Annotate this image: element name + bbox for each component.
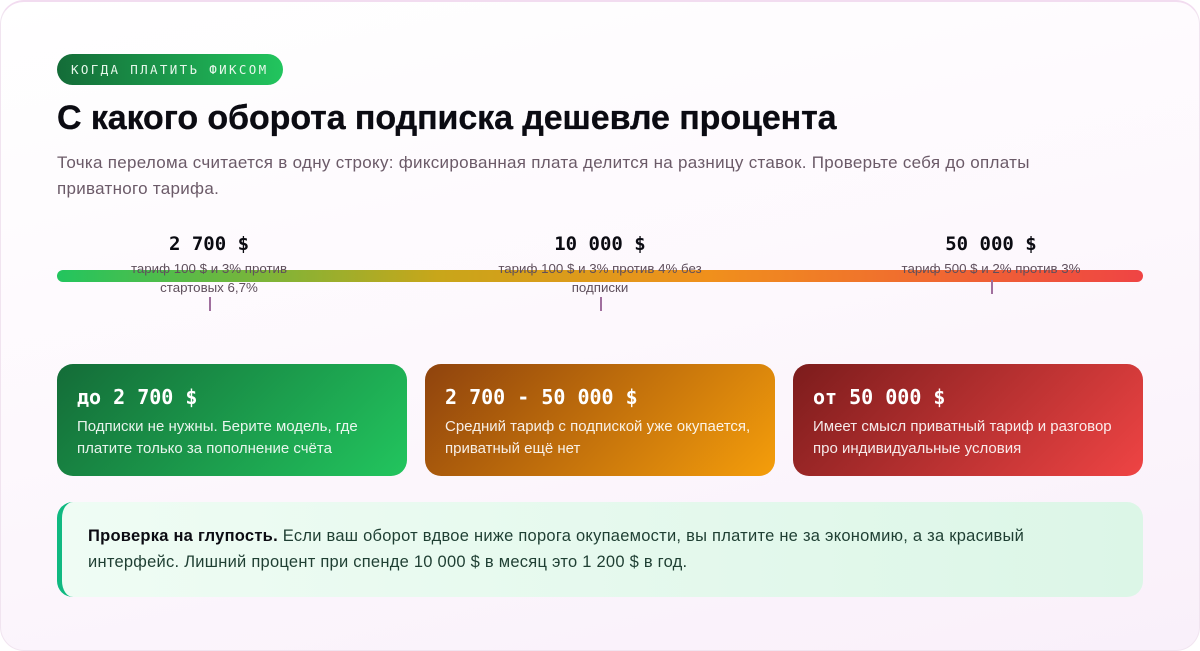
- panel text: Средний тариф с подпиской уже окупается,: [445, 418, 750, 435]
- gradient bar: [57, 270, 1143, 282]
- callout text: интерфейс. Лишний процент при спенде 10 000 $ в месяц это 1 200 $ в год.: [88, 553, 687, 571]
- marker note: [498, 261, 702, 295]
- panel text: Подписки не нужны. Берите модель, где: [77, 418, 358, 435]
- marker note: тариф 100 $ и 3% против: [131, 261, 287, 276]
- panel heading: 2 700 - 50 000 $: [445, 385, 638, 409]
- marker note: тариф 500 $ и 2% против 3%: [902, 261, 1080, 276]
- callout text: Проверка на глупость. Если ваш оборот вдвое ниже порога окупаемости, вы платите не за экономию, а за красивый: [88, 527, 1024, 545]
- marker tick: [209, 297, 211, 311]
- scale: turnover thresholds: [57, 270, 1143, 282]
- panel text: [77, 418, 358, 457]
- callout: sanity check: [57, 502, 1143, 597]
- subtitle: приватного тарифа.: [57, 179, 219, 198]
- marker: 50 000 $: [902, 233, 1080, 294]
- marker: 10 000 $: [498, 233, 702, 311]
- marker value: 10 000 $: [554, 233, 646, 255]
- subtitle: Точка перелома считается в одну строку: фиксированная плата делится на разницу ставок. Проверьте себя до оплаты: [57, 153, 1030, 172]
- panel heading: до 2 700 $: [77, 385, 197, 409]
- panel: 2 700 - 50 000 $: [425, 364, 775, 476]
- title: С какого оборота подписка дешевле процента: [57, 99, 836, 137]
- marker: 2 700 $: [131, 233, 287, 311]
- marker value: 2 700 $: [169, 233, 249, 255]
- panel text: про индивидуальные условия: [813, 440, 1021, 457]
- subtitle: [57, 153, 1030, 198]
- panel heading: от 50 000 $: [813, 385, 945, 409]
- panel text: [813, 418, 1112, 457]
- panel text: Имеет смысл приватный тариф и разговор: [813, 418, 1112, 435]
- badge: when to pay fixed: КОГДА ПЛАТИТЬ ФИКСОМ: [71, 62, 269, 77]
- marker tick: [600, 297, 602, 311]
- marker note: подписки: [572, 280, 628, 295]
- panel text: платите только за пополнение счёта: [77, 440, 332, 457]
- badge: when to pay fixed: [57, 54, 283, 85]
- marker note: [131, 261, 287, 295]
- panel: from 50 000 $: [793, 364, 1143, 476]
- marker tick: [991, 280, 993, 294]
- marker note: стартовых 6,7%: [160, 280, 258, 295]
- marker note: тариф 100 $ и 3% против 4% без: [498, 261, 702, 276]
- panel text: приватный ещё нет: [445, 440, 580, 457]
- callout text: [88, 527, 1024, 571]
- panel text: [445, 418, 750, 457]
- panel: up to 2 700 $: [57, 364, 407, 476]
- marker value: 50 000 $: [945, 233, 1037, 255]
